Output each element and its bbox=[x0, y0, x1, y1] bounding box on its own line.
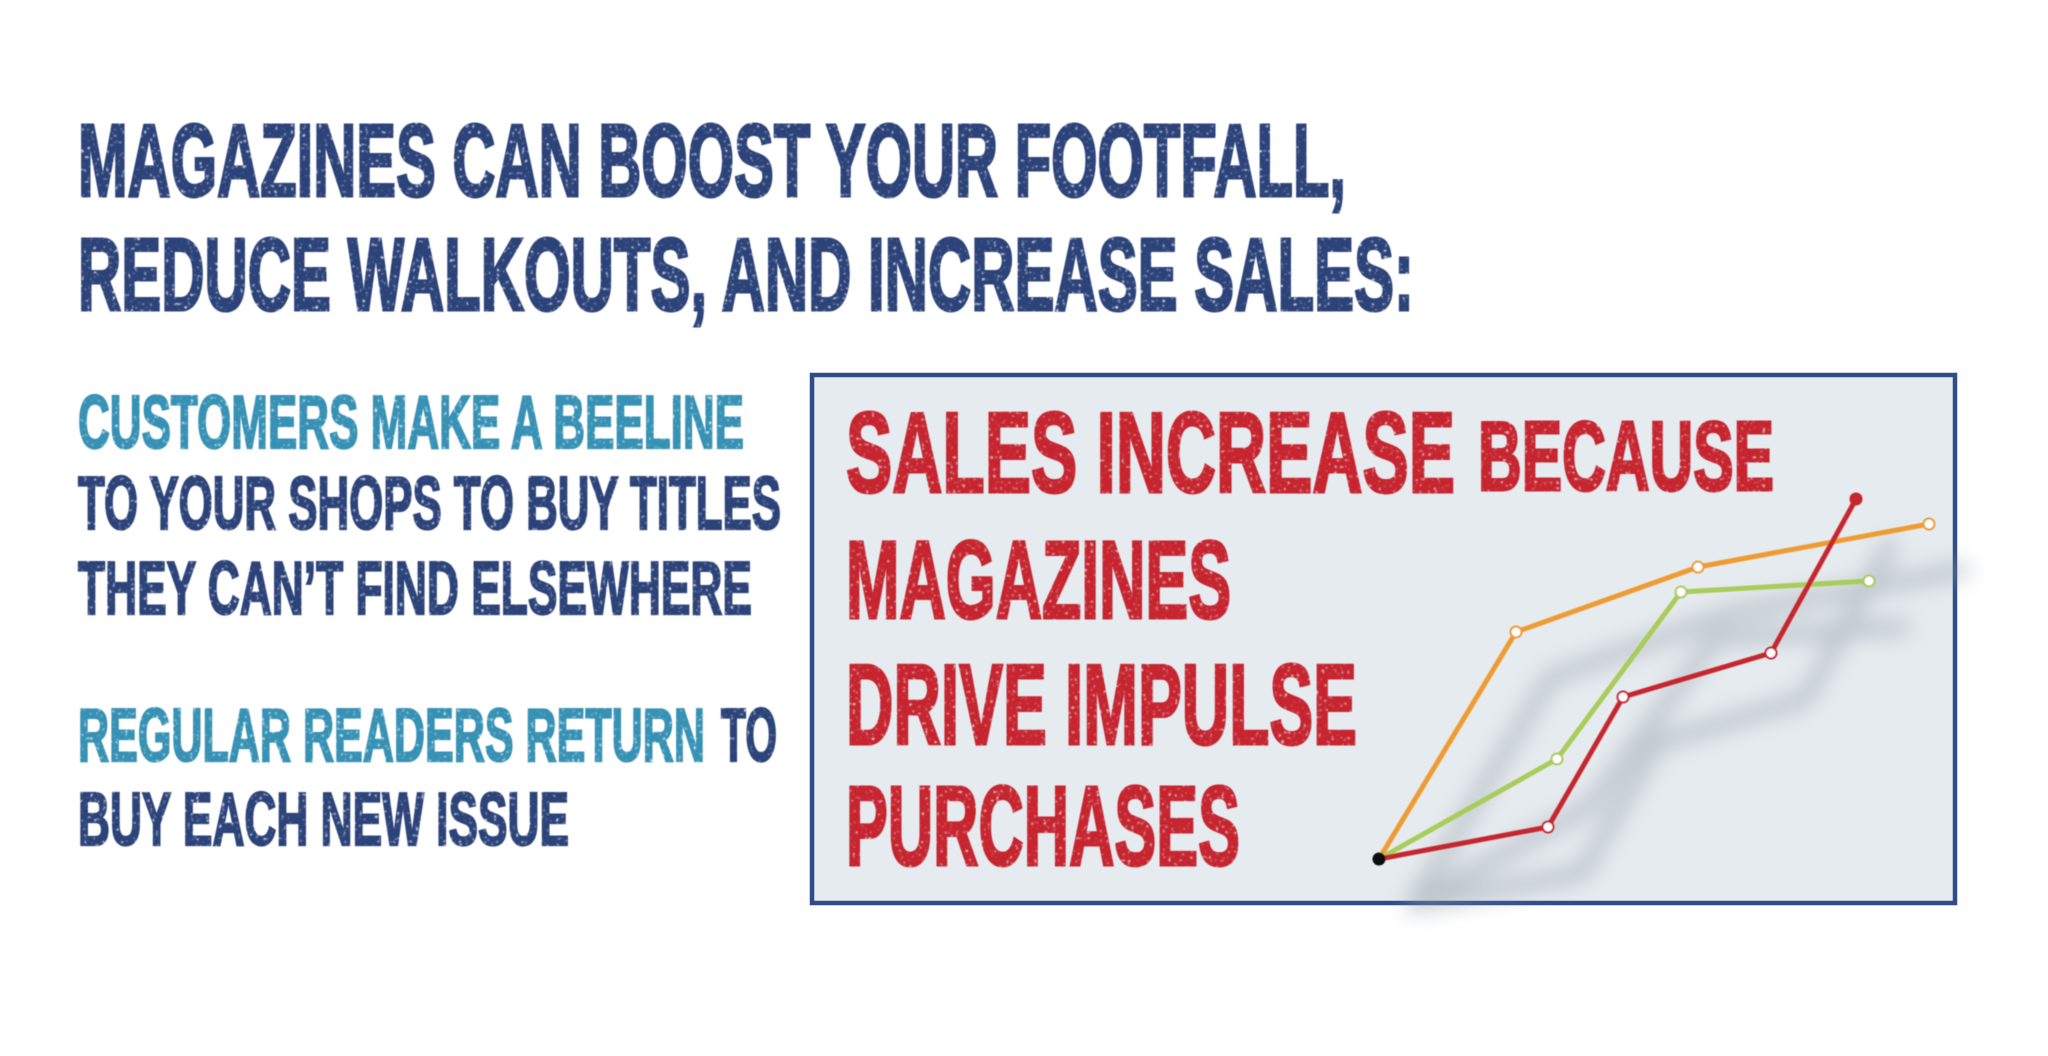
line chart bbox=[1372, 492, 1963, 905]
body line 2: THEY CAN’T FIND ELSEWHERE bbox=[78, 546, 752, 630]
title bbox=[78, 103, 1414, 332]
highlighted phrase: REGULAR READERS RETURN bbox=[78, 693, 705, 777]
green series bbox=[1379, 581, 1869, 859]
chart lines and markers bbox=[1372, 492, 1934, 866]
orange markers bbox=[1510, 518, 1934, 638]
origin point bbox=[1372, 852, 1386, 866]
panel heading bbox=[846, 390, 1774, 889]
red markers bbox=[1542, 648, 1776, 832]
orange series bbox=[1379, 524, 1929, 859]
red series bbox=[1379, 499, 1856, 859]
red end point bbox=[1850, 492, 1862, 506]
heading: purchases: PURCHASES bbox=[846, 763, 1240, 889]
text block: regular readers return bbox=[78, 693, 777, 861]
heading: drive impulse: DRIVE IMPULSE bbox=[846, 642, 1357, 769]
chart shadows bbox=[1413, 545, 1963, 905]
green markers bbox=[1552, 576, 1874, 764]
body word: TO bbox=[721, 693, 777, 777]
heading: because: BECAUSE bbox=[1478, 401, 1774, 511]
body line 1: TO YOUR SHOPS TO BUY TITLES bbox=[78, 461, 781, 545]
heading: sales increase: SALES INCREASE bbox=[846, 390, 1455, 517]
panel: sales increase bbox=[812, 375, 1955, 903]
text block: customers make a beeline bbox=[78, 380, 781, 630]
body line: BUY EACH NEW ISSUE bbox=[78, 777, 569, 861]
highlighted phrase: CUSTOMERS MAKE A BEELINE bbox=[78, 380, 744, 464]
heading: magazines: MAGAZINES bbox=[846, 519, 1231, 642]
